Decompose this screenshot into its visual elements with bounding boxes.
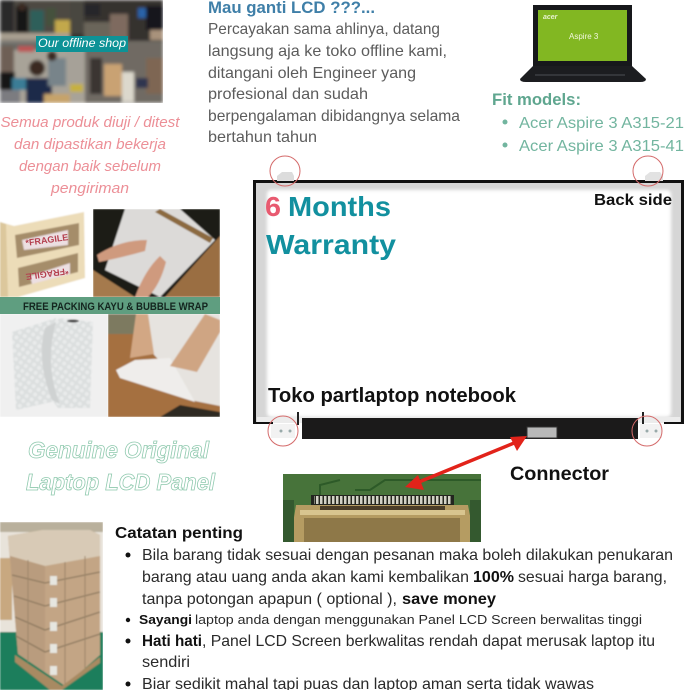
- heading: catatan penting: Catatan penting: [115, 525, 243, 542]
- text: offline shop paragraph: ditangani oleh Engineer yang: [208, 65, 416, 82]
- text: offline shop paragraph: berpengalaman dibidangnya selama: [208, 108, 460, 125]
- heading: 6 months warranty: [265, 191, 396, 260]
- heading: fit models: Fit models:: [492, 90, 581, 109]
- text: offline shop paragraph: [208, 21, 460, 146]
- photo: bubble roll: [0, 314, 108, 417]
- heading: 6 months warranty: 6: [265, 191, 281, 222]
- panel connector socket: [527, 427, 557, 438]
- photo: connector close-up: [283, 474, 481, 542]
- mounting tab: bottom right: [632, 416, 662, 446]
- note 1: 100%: [473, 569, 514, 586]
- label: connector: Connector: [510, 464, 610, 485]
- text: offline shop paragraph: profesional dan sudah: [208, 86, 368, 103]
- note 1: sesuai harga barang,: [518, 569, 667, 586]
- text: tested products note: Semua produk diuji / ditest: [0, 114, 180, 131]
- label: fragile: *FRAGILE: [25, 232, 69, 248]
- title: genuine original laptop lcd panel: Genuine Original: [28, 437, 210, 463]
- note 3: Hati hati: [142, 633, 202, 650]
- note 1: [126, 547, 673, 608]
- note 3: sendiri: [142, 654, 190, 671]
- title: genuine original laptop lcd panel: [26, 437, 216, 495]
- arrow: connector pointer: [405, 436, 527, 490]
- note 2: Sayangi: [139, 612, 192, 627]
- heading: 6 months warranty: Months: [288, 191, 391, 222]
- text: tested products note: dan dipastikan bekerja: [14, 136, 166, 153]
- text: offline shop paragraph: langsung aja ke toko offline kami,: [208, 43, 447, 60]
- photo: offline shop collage: [0, 0, 163, 103]
- list: important notes: [126, 547, 673, 690]
- list: compatible models: Acer Aspire 3 A315-21: [519, 115, 684, 132]
- heading: 6 months warranty: Warranty: [266, 229, 396, 260]
- mounting tab: bottom left: [268, 416, 298, 446]
- photo: bubble wrap in box: [93, 209, 220, 297]
- connector strip: [302, 418, 638, 439]
- photo: stacked pallet boxes: [0, 522, 103, 690]
- list: compatible models: [502, 115, 684, 155]
- title: genuine original laptop lcd panel: Laptop LCD Panel: [26, 469, 216, 495]
- text: tested products note: dengan baik sebelum: [19, 158, 161, 175]
- note 3: [126, 633, 655, 671]
- note 1: tanpa potongan apapun ( optional ),: [142, 591, 397, 608]
- text: tested products note: pengiriman: [50, 180, 129, 197]
- photo: hands on wrap: [108, 314, 220, 417]
- illustration: acer laptop: [520, 5, 646, 82]
- text: offline shop paragraph: bertahun tahun: [208, 129, 317, 146]
- label: back side: Back side: [594, 192, 672, 209]
- illustration: lcd panel back side: [253, 156, 684, 446]
- note 2: laptop anda dengan menggunakan Panel LCD Screen berwalitas tinggi: [195, 612, 642, 627]
- photo: wooden crate: [0, 209, 93, 297]
- note 3: , Panel LCD Screen berkwalitas rendah dapat merusak laptop itu: [202, 633, 655, 650]
- label: fragile: [25, 232, 69, 282]
- banner: free packing: FREE PACKING KAYU & BUBBLE WRAP: [23, 301, 208, 313]
- mounting tab: top left: [270, 156, 300, 186]
- illustration: acer laptop: acer: [543, 14, 559, 21]
- note 1: save money: [402, 591, 496, 608]
- illustration: acer laptop: Aspire 3: [569, 32, 599, 41]
- note 1: Bila barang tidak sesuai dengan pesanan maka boleh dilakukan penukaran: [142, 547, 673, 564]
- mounting tab: top right: [633, 156, 663, 186]
- label: fragile: *FRAGILE: [25, 266, 69, 282]
- banner: free packing: [0, 297, 220, 314]
- text: tested products note: [0, 114, 180, 197]
- text: offline shop paragraph: Percayakan sama ahlinya, datang: [208, 21, 440, 38]
- list: compatible models: Acer Aspire 3 A315-41: [519, 138, 684, 155]
- note 1: barang atau uang anda akan kami kembalikan: [142, 569, 469, 586]
- label: our offline shop: Our offline shop: [38, 36, 126, 50]
- label: toko partlaptop notebook: Toko partlaptop notebook: [268, 385, 517, 407]
